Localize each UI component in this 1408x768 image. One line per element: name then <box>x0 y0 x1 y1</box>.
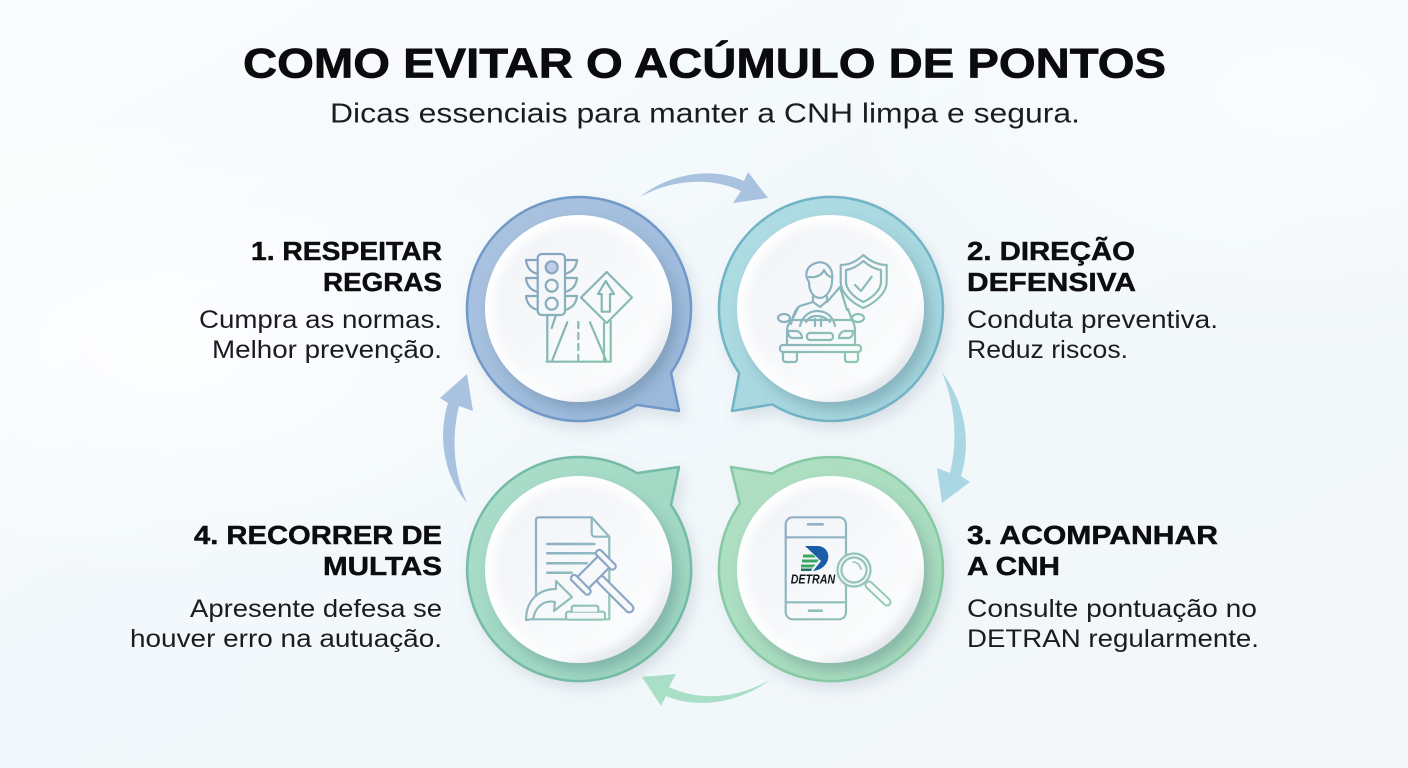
arrow: step 1 to step 2 <box>640 172 768 203</box>
text: step 2 description <box>967 306 1218 364</box>
heading: step 1 <box>251 236 442 297</box>
text: step 3 description: DETRAN regularmente. <box>967 625 1259 653</box>
icon: magnifier <box>838 554 887 602</box>
panel: step 4 text <box>130 520 442 653</box>
heading: step 3 <box>967 520 1218 581</box>
text: step 3 description: Consulte pontuação no <box>967 595 1257 623</box>
heading: step 3: 3. ACOMPANHAR <box>967 520 1218 550</box>
icon: document with gavel and appeal arrow <box>526 517 647 626</box>
heading: step 4: MULTAS <box>323 551 442 581</box>
text: step 1 description <box>199 306 442 364</box>
panel: step 1 bubble <box>467 197 691 421</box>
heading: step 1: 1. RESPEITAR <box>251 236 442 266</box>
heading: step 2 <box>967 236 1136 297</box>
text: step 4 description: Apresente defesa se <box>190 595 442 623</box>
panel: step 2 text <box>967 236 1218 364</box>
icon: DETRAN logo: DETRAN <box>791 572 836 586</box>
panel: step 4 bubble <box>467 457 691 681</box>
arrow: step 4 to step 1 <box>440 374 473 503</box>
text: step 2 description: Reduz riscos. <box>967 336 1128 364</box>
text: step 2 description: Conduta preventiva. <box>967 306 1218 334</box>
text: step 1 description: Melhor prevenção. <box>212 336 442 364</box>
panel: step 3 bubble <box>719 457 943 681</box>
title: COMO EVITAR O ACÚMULO DE PONTOS <box>243 38 1166 86</box>
panel: step 1 text <box>199 236 442 364</box>
heading: step 2: 2. DIREÇÃO <box>967 236 1135 266</box>
text: step 4 description <box>130 595 442 653</box>
heading: step 1: REGRAS <box>323 267 442 297</box>
panel: step 3 text <box>967 520 1259 653</box>
panel: step 2 bubble <box>719 197 943 421</box>
icon: phone with DETRAN logo and magnifier <box>786 517 887 619</box>
heading: step 2: DEFENSIVA <box>967 267 1136 297</box>
heading: step 4 <box>194 520 442 581</box>
text: step 4 description: houver erro na autuação. <box>130 625 442 653</box>
text: step 3 description <box>967 595 1259 653</box>
heading: step 3: A CNH <box>967 551 1060 581</box>
icon: traffic light and road sign <box>526 254 632 362</box>
arrow: step 2 to step 3 <box>937 372 970 503</box>
text: step 1 description: Cumpra as normas. <box>199 306 442 334</box>
icon: driver in car with shield <box>778 255 887 362</box>
arrow: step 3 to step 4 <box>642 674 771 706</box>
heading: step 4: 4. RECORRER DE <box>194 520 442 550</box>
subtitle: Dicas essenciais para manter a CNH limpa e segura. <box>330 98 1080 128</box>
